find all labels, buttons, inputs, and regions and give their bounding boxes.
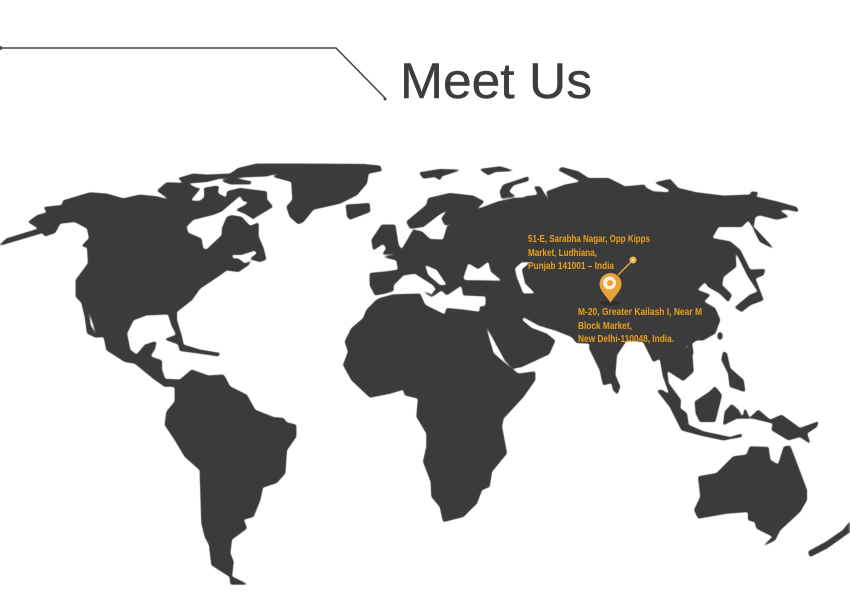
landmass: Africa: [343, 294, 535, 522]
address: New Delhi: New Delhi-110048, India.: [578, 333, 674, 345]
address: Ludhiana: [528, 233, 650, 272]
landmass: Asia: [480, 167, 742, 440]
address: New Delhi: Block Market,: [578, 320, 632, 332]
landmass: North America: [0, 183, 273, 387]
landmass: South America: [130, 342, 296, 584]
landmass: East Asia: [640, 179, 798, 340]
title: Meet Us: [400, 53, 592, 109]
address: New Delhi: M-20, Greater Kailash I, Near M: [578, 306, 702, 318]
world map: [0, 164, 850, 584]
address: Ludhiana: Market, Ludhiana,: [528, 247, 597, 259]
landmass: Greenland and Arctic islands: [178, 164, 382, 224]
address: New Delhi: [578, 306, 702, 345]
landmass: Europe: [370, 167, 540, 310]
landmass: Southeast Asia, Australia and New Zealand: [694, 352, 850, 557]
address: Ludhiana: 51-E, Sarabha Nagar, Opp Kipps: [528, 233, 650, 245]
address: Ludhiana: Punjab 141001 – India: [528, 260, 614, 272]
icon: location pin: [600, 256, 636, 305]
header connector line: [0, 46, 386, 100]
